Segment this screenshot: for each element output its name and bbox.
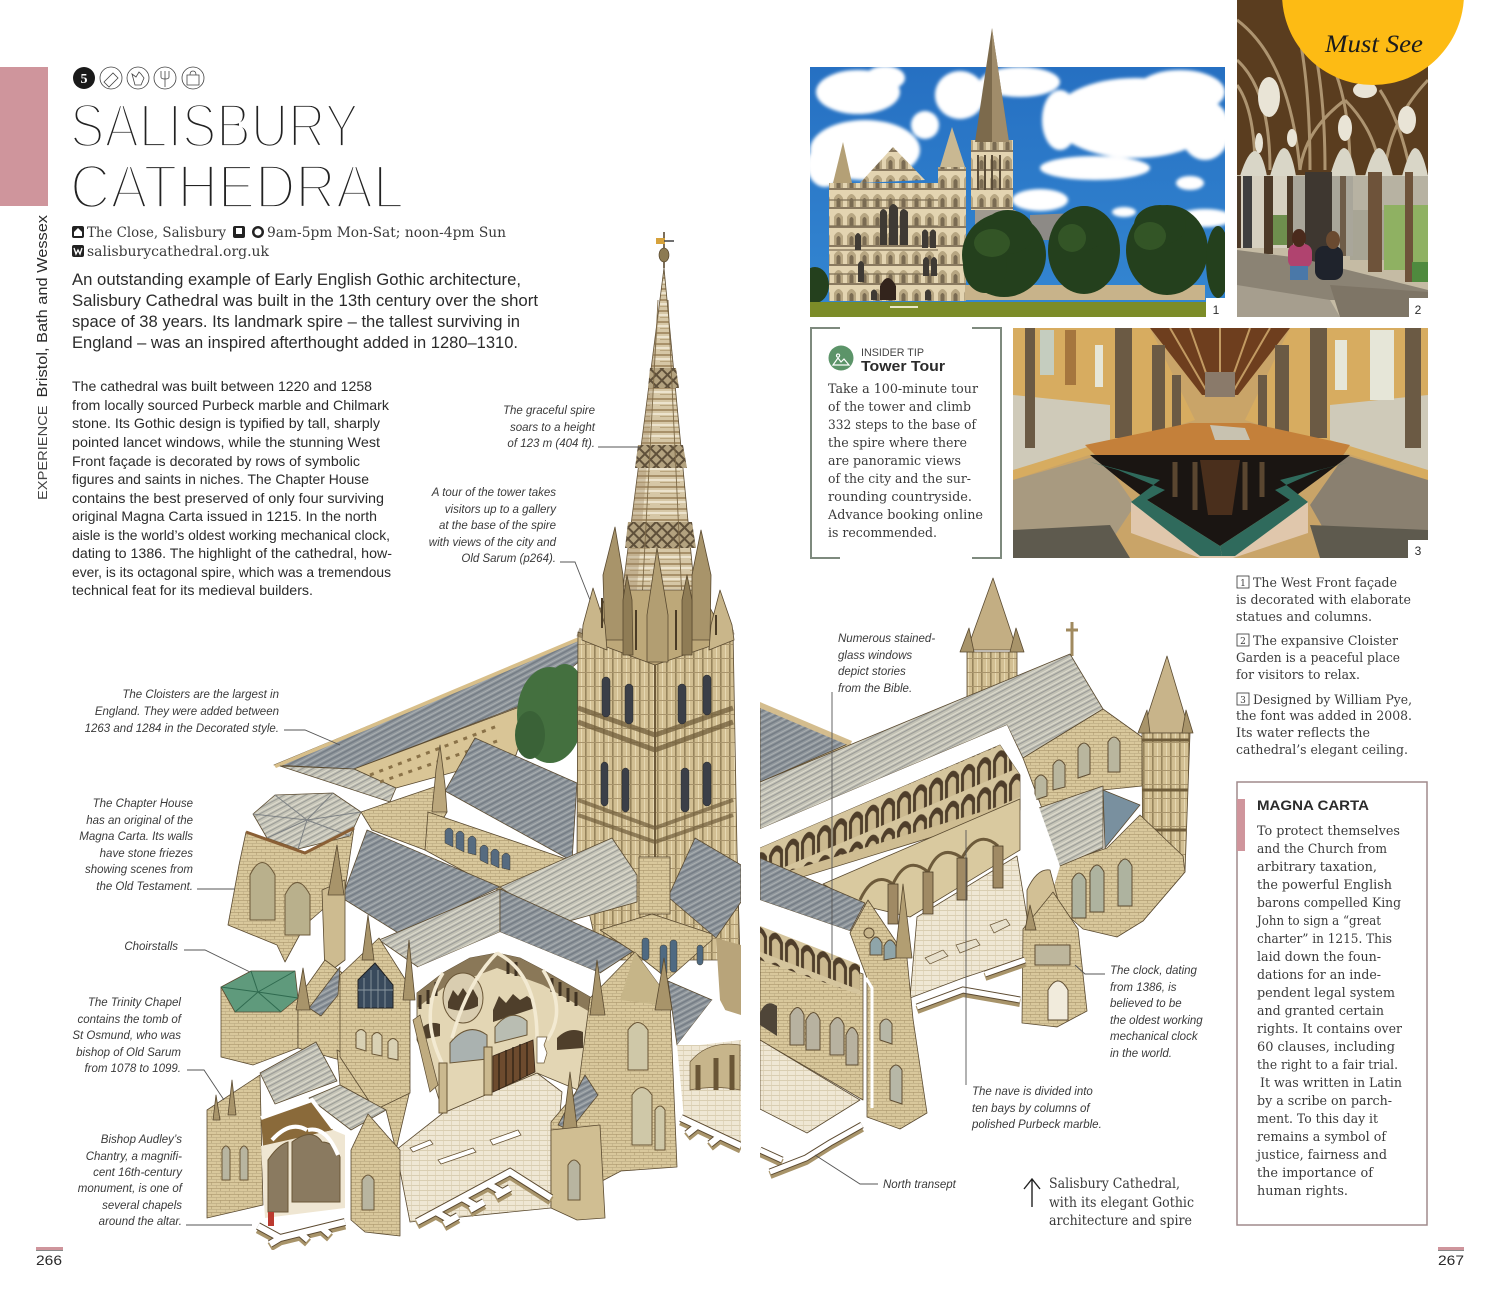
practical information: The Close, Salisbury: [87, 225, 226, 241]
annotation: Trinity Chapel: from 1078 to 1099.: [84, 1063, 181, 1075]
rear west towers: [960, 578, 1078, 700]
photo 3: nave and font: [1013, 328, 1428, 558]
panel: Magna Carta: arbitrary taxation,: [1257, 860, 1377, 875]
annotation: north transept: North transept: [883, 1179, 957, 1191]
annotation: chapter house: has an original of the: [86, 815, 193, 827]
cutaway vault void: [418, 932, 600, 974]
clock porch: [1022, 892, 1087, 1027]
illustration caption: Salisbury Cathedral,: [1049, 1176, 1180, 1192]
caption 3: Its water reflects the: [1236, 726, 1370, 741]
annotation: nave: [971, 1086, 1102, 1131]
nave arcade and floor: [823, 799, 1027, 998]
title: CATHEDRAL: [70, 153, 404, 222]
annotations right aligned: [72, 405, 596, 1228]
photo 2: Cloisters: [1237, 0, 1428, 317]
Trinity chapel: [221, 971, 298, 1065]
annotation: chapter house: The Chapter House: [93, 798, 193, 810]
spire: [622, 268, 696, 612]
floor west: [396, 1073, 562, 1222]
caption 1: is decorated with elaborate: [1236, 593, 1411, 608]
panel: Magna Carta: charter” in 1215. This: [1257, 932, 1392, 947]
caption 3: the font was added in 2008.: [1236, 709, 1412, 724]
north-east pier block: [551, 952, 677, 1220]
tower pinnacles: [582, 527, 734, 665]
body text column: figures and saints in niches. The Chapter House: [72, 471, 369, 487]
insider tip box: the spire where there: [828, 436, 967, 451]
interior vault and choir: [413, 953, 590, 1113]
annotation: chapter house: showing scenes from: [85, 864, 193, 876]
insider tip box: Take a 100-minute tour: [828, 382, 979, 397]
cutaway illustration: east half: [760, 578, 1193, 1175]
annotation: tower tour: Old Sarum (p264).: [461, 553, 556, 565]
annotation: Audley chantry: around the altar.: [99, 1216, 182, 1228]
intro paragraph: Salisbury Cathedral was built in the 13th century over the short: [72, 292, 538, 310]
annotation: nave: ten bays by columns of: [972, 1103, 1091, 1115]
annotation: stained glass: depict stories: [838, 666, 906, 678]
annotation: cloisters: The Cloisters are the largest in: [122, 689, 279, 701]
plan outline east: [760, 960, 1025, 1175]
annotation: nave: The nave is divided into: [972, 1086, 1093, 1098]
north transept floor: [760, 1040, 860, 1133]
insider tip box: Advance booking online: [827, 508, 983, 523]
plan outline west: [258, 1118, 741, 1247]
annotation: chapter house: Magna Carta. Its walls: [79, 831, 193, 843]
panel: Magna Carta: ment. To this day it: [1257, 1112, 1379, 1127]
caption 2: 2: [1240, 637, 1246, 647]
white cutaway void: [760, 725, 1018, 830]
caption 1: 1: [1240, 579, 1246, 589]
south aisle wall with windows: [600, 914, 712, 1045]
photo captions: [1236, 576, 1412, 758]
caption 1: [1236, 576, 1411, 625]
annotation: chapter house: have stone friezes: [100, 848, 193, 860]
title: [70, 92, 404, 222]
tombs on the floor: [410, 1130, 521, 1164]
annotation: tower tour: at the base of the spire: [439, 520, 556, 532]
intro paragraph: England – was an inspired afterthought added in 1280–1310.: [72, 334, 518, 352]
connecting walls: [361, 785, 447, 850]
insider tip box: INSIDER TIP: [861, 347, 924, 359]
photo 3: nave and font: 3: [1415, 544, 1422, 558]
photo 1: West Front: 1: [1213, 303, 1220, 317]
panel: Magna Carta: the importance of: [1257, 1166, 1374, 1181]
annotation: nave: polished Purbeck marble.: [971, 1119, 1102, 1131]
insider tip box: Tower Tour: [861, 358, 945, 375]
caption 3: cathedral’s elegant ceiling.: [1236, 743, 1408, 758]
practical information: 9am-5pm Mon-Sat; noon-4pm Sun: [267, 225, 506, 241]
caption 1: The West Front façade: [1253, 576, 1397, 591]
caption 2: for visitors to relax.: [1236, 668, 1360, 683]
buttress connecting chapel and transept: [298, 845, 345, 1060]
panel: Magna Carta: MAGNA CARTA: [1257, 797, 1369, 813]
page number left: 266: [36, 1253, 62, 1268]
spire rising above photo: [975, 28, 1009, 142]
annotation: Trinity Chapel: St Osmund, who was: [72, 1030, 181, 1042]
panel: Magna Carta: the powerful English: [1257, 878, 1393, 893]
caption 3: 3: [1240, 696, 1246, 706]
body text column: ever, is its octagonal spire, which was a tremendous: [72, 564, 391, 580]
title: SALISBURY: [70, 92, 359, 161]
icon row: 5: [80, 72, 88, 87]
annotation: Audley chantry: Chantry, a magnifi-: [86, 1151, 182, 1163]
tree behind tower: [515, 664, 583, 763]
annotation: Trinity Chapel: bishop of Old Sarum: [76, 1047, 181, 1059]
must see badge: Must See: [1324, 31, 1423, 58]
north transept front: [850, 884, 927, 1129]
practical information: [72, 225, 506, 260]
annotation: Audley chantry: cent 16th-century: [93, 1167, 183, 1179]
body text column: aisle is the world’s oldest working mechanical clock,: [72, 527, 390, 543]
body text column: contains the best preserved of only four surviving: [72, 490, 384, 506]
annotation: stained glass: [838, 633, 935, 695]
annotation: chapter house: [79, 798, 193, 893]
roof F, south transept: [425, 738, 577, 890]
Bishop Audley's chantry porch: [207, 1042, 400, 1236]
intro paragraph: An outstanding example of Early English Gothic architecture,: [72, 271, 521, 289]
panel: Magna Carta: It was written in Latin: [1260, 1076, 1403, 1091]
west gable wall and tower: [1023, 656, 1193, 921]
white strip at north porch: [1030, 794, 1060, 885]
cutaway illustration: west half: [207, 232, 741, 1247]
panel: Magna Carta: by a scribe on parch-: [1257, 1094, 1392, 1109]
photo 2: Cloisters: 2: [1415, 303, 1422, 317]
annotation: spire: The graceful spire: [503, 405, 595, 417]
arch beside the porch: [1027, 870, 1058, 925]
chapter house: [228, 793, 361, 962]
right-hand interior, west half: [677, 938, 741, 1146]
insider tip box: 332 steps to the base of: [828, 418, 977, 433]
panel: Magna Carta: the right to a fair trial.: [1257, 1058, 1398, 1073]
insider tip box: [811, 328, 1001, 558]
annotation: Trinity Chapel: [72, 997, 183, 1075]
caption 2: Garden is a peaceful place: [1236, 651, 1400, 666]
annotation: Audley chantry: several chapels: [102, 1200, 182, 1212]
panel: Magna Carta: remains a symbol of: [1257, 1130, 1387, 1145]
panel: Magna Carta: pendent legal system: [1257, 986, 1395, 1001]
panel: Magna Carta: justice, fairness and: [1255, 1148, 1387, 1163]
south-east transept block: [296, 915, 415, 1150]
annotation: tower tour: visitors up to a gallery: [445, 504, 557, 516]
panel: Magna Carta: [1237, 782, 1427, 1225]
annotation: cloisters: 1263 and 1284 in the Decorated style.: [85, 723, 279, 735]
body text column: pointed lancet windows, while the stunning West: [72, 434, 380, 450]
panel: Magna Carta: dations for an inde-: [1257, 968, 1381, 983]
white void at transept: [760, 900, 850, 932]
annotation: Audley chantry: monument, is one of: [78, 1183, 184, 1195]
annotation: stained glass: Numerous stained-: [838, 633, 935, 645]
annotation: cloisters: [85, 689, 279, 735]
crossing roofs: [342, 830, 741, 973]
illustration caption: architecture and spire: [1049, 1213, 1192, 1229]
annotation: Audley chantry: [78, 1134, 184, 1228]
panel: Magna Carta: 60 clauses, including: [1257, 1040, 1395, 1055]
intro paragraph: space of 38 years. Its landmark spire – the tallest surviving in: [72, 313, 520, 331]
panel: Magna Carta: and the Church from: [1257, 842, 1387, 857]
insider tip box: are panoramic views: [828, 454, 961, 469]
body text column: dating to 1386. The highlight of the cathedral, how-: [72, 545, 392, 561]
annotation: clock: in the world.: [1110, 1048, 1172, 1060]
annotation: cloisters: England. They were added between: [95, 706, 279, 718]
body text column: technical feat for its medieval builders.: [72, 582, 313, 598]
panel: Magna Carta: barons compelled King: [1257, 896, 1401, 911]
annotation: tower tour: with views of the city and: [429, 537, 557, 549]
icon row: [73, 67, 204, 89]
annotation: Trinity Chapel: contains the tomb of: [77, 1014, 183, 1026]
annotation: stained glass: from the Bible.: [838, 683, 912, 695]
caption 2: The expansive Cloister: [1253, 634, 1399, 649]
caption 2: [1236, 634, 1400, 683]
north transept wall: [760, 926, 863, 1100]
lower gray roof: [760, 858, 865, 931]
panel: Magna Carta: rights. It contains over: [1257, 1022, 1403, 1037]
panel: Magna Carta: laid down the foun-: [1257, 950, 1381, 965]
vertical chapter label: EXPERIENCE Bristol, Bath and Wessex: [35, 214, 51, 500]
page number right: [1438, 1247, 1464, 1268]
panel: Magna Carta: human rights.: [1257, 1184, 1348, 1199]
insider tip box: is recommended.: [828, 526, 937, 541]
annotations left aligned: [838, 633, 1203, 1191]
leader lines: [184, 447, 1105, 1225]
insider tip box: of the city and the sur-: [828, 472, 971, 487]
panel: Magna Carta: and granted certain: [1257, 1004, 1385, 1019]
insider tip box: of the tower and climb: [828, 400, 971, 415]
caption 1: statues and columns.: [1236, 610, 1372, 625]
annotation: clock: mechanical clock: [1110, 1031, 1199, 1043]
annotation: clock: the oldest working: [1110, 1015, 1203, 1027]
annotation: stained glass: glass windows: [838, 650, 912, 662]
photo 1: West Front: [801, 28, 1233, 317]
panel: Magna Carta: John to sign a “great: [1255, 914, 1382, 929]
annotation: clock: [1110, 965, 1203, 1060]
annotation: chapter house: the Old Testament.: [96, 881, 193, 893]
intro paragraph: [72, 271, 538, 352]
annotation: tower tour: A tour of the tower takes: [431, 487, 556, 499]
insider tip box: rounding countryside.: [828, 490, 972, 505]
body text column: from locally sourced Purbeck marble and Chilmark: [72, 397, 390, 413]
icon: mountain: [828, 346, 854, 370]
body text column: The cathedral was built between 1220 and 1258: [72, 378, 372, 394]
annotation: spire: soars to a height: [510, 422, 596, 434]
page number right: 267: [1438, 1253, 1464, 1268]
annotation: choirstalls: Choirstalls: [124, 941, 178, 953]
body text column: Front façade is decorated by rows of symbolic: [72, 453, 360, 469]
body text column: [72, 378, 392, 598]
north aisle roofs and wall: [1030, 786, 1185, 937]
main nave roof: [760, 654, 1103, 829]
caption 3: Designed by William Pye,: [1253, 693, 1412, 708]
spire finial: [656, 232, 674, 268]
panel: Magna Carta: To protect themselves: [1257, 824, 1400, 839]
annotation: clock: believed to be: [1110, 998, 1182, 1010]
illustration caption: with its elegant Gothic: [1049, 1195, 1194, 1211]
annotation: clock: The clock, dating: [1110, 965, 1198, 977]
must see badge: [1282, 0, 1464, 85]
cloister roof: [274, 636, 581, 850]
annotation: Audley chantry: Bishop Audley’s: [101, 1134, 182, 1146]
body text column: stone. Its Gothic design is typified by tall, sharply: [72, 415, 380, 431]
annotation: tower tour: [429, 487, 557, 565]
annotation: spire: of 123 m (404 ft).: [507, 438, 595, 450]
illustration caption: [1049, 1176, 1194, 1229]
body text column: original Magna Carta issued in 1215. In the north: [72, 508, 377, 524]
section colour tab: [0, 67, 48, 206]
annotation: spire: [503, 405, 596, 450]
caption 3: [1236, 693, 1412, 758]
practical information: salisburycathedral.org.uk: [87, 244, 270, 260]
vault row: [760, 745, 1020, 890]
rear gray roof: [760, 702, 852, 782]
page number left: [36, 1247, 63, 1268]
annotation: Trinity Chapel: The Trinity Chapel: [88, 997, 181, 1009]
arrow: [1024, 1179, 1040, 1207]
tower lower stages: [577, 630, 740, 960]
annotation: clock: from 1386, is: [1110, 982, 1177, 994]
